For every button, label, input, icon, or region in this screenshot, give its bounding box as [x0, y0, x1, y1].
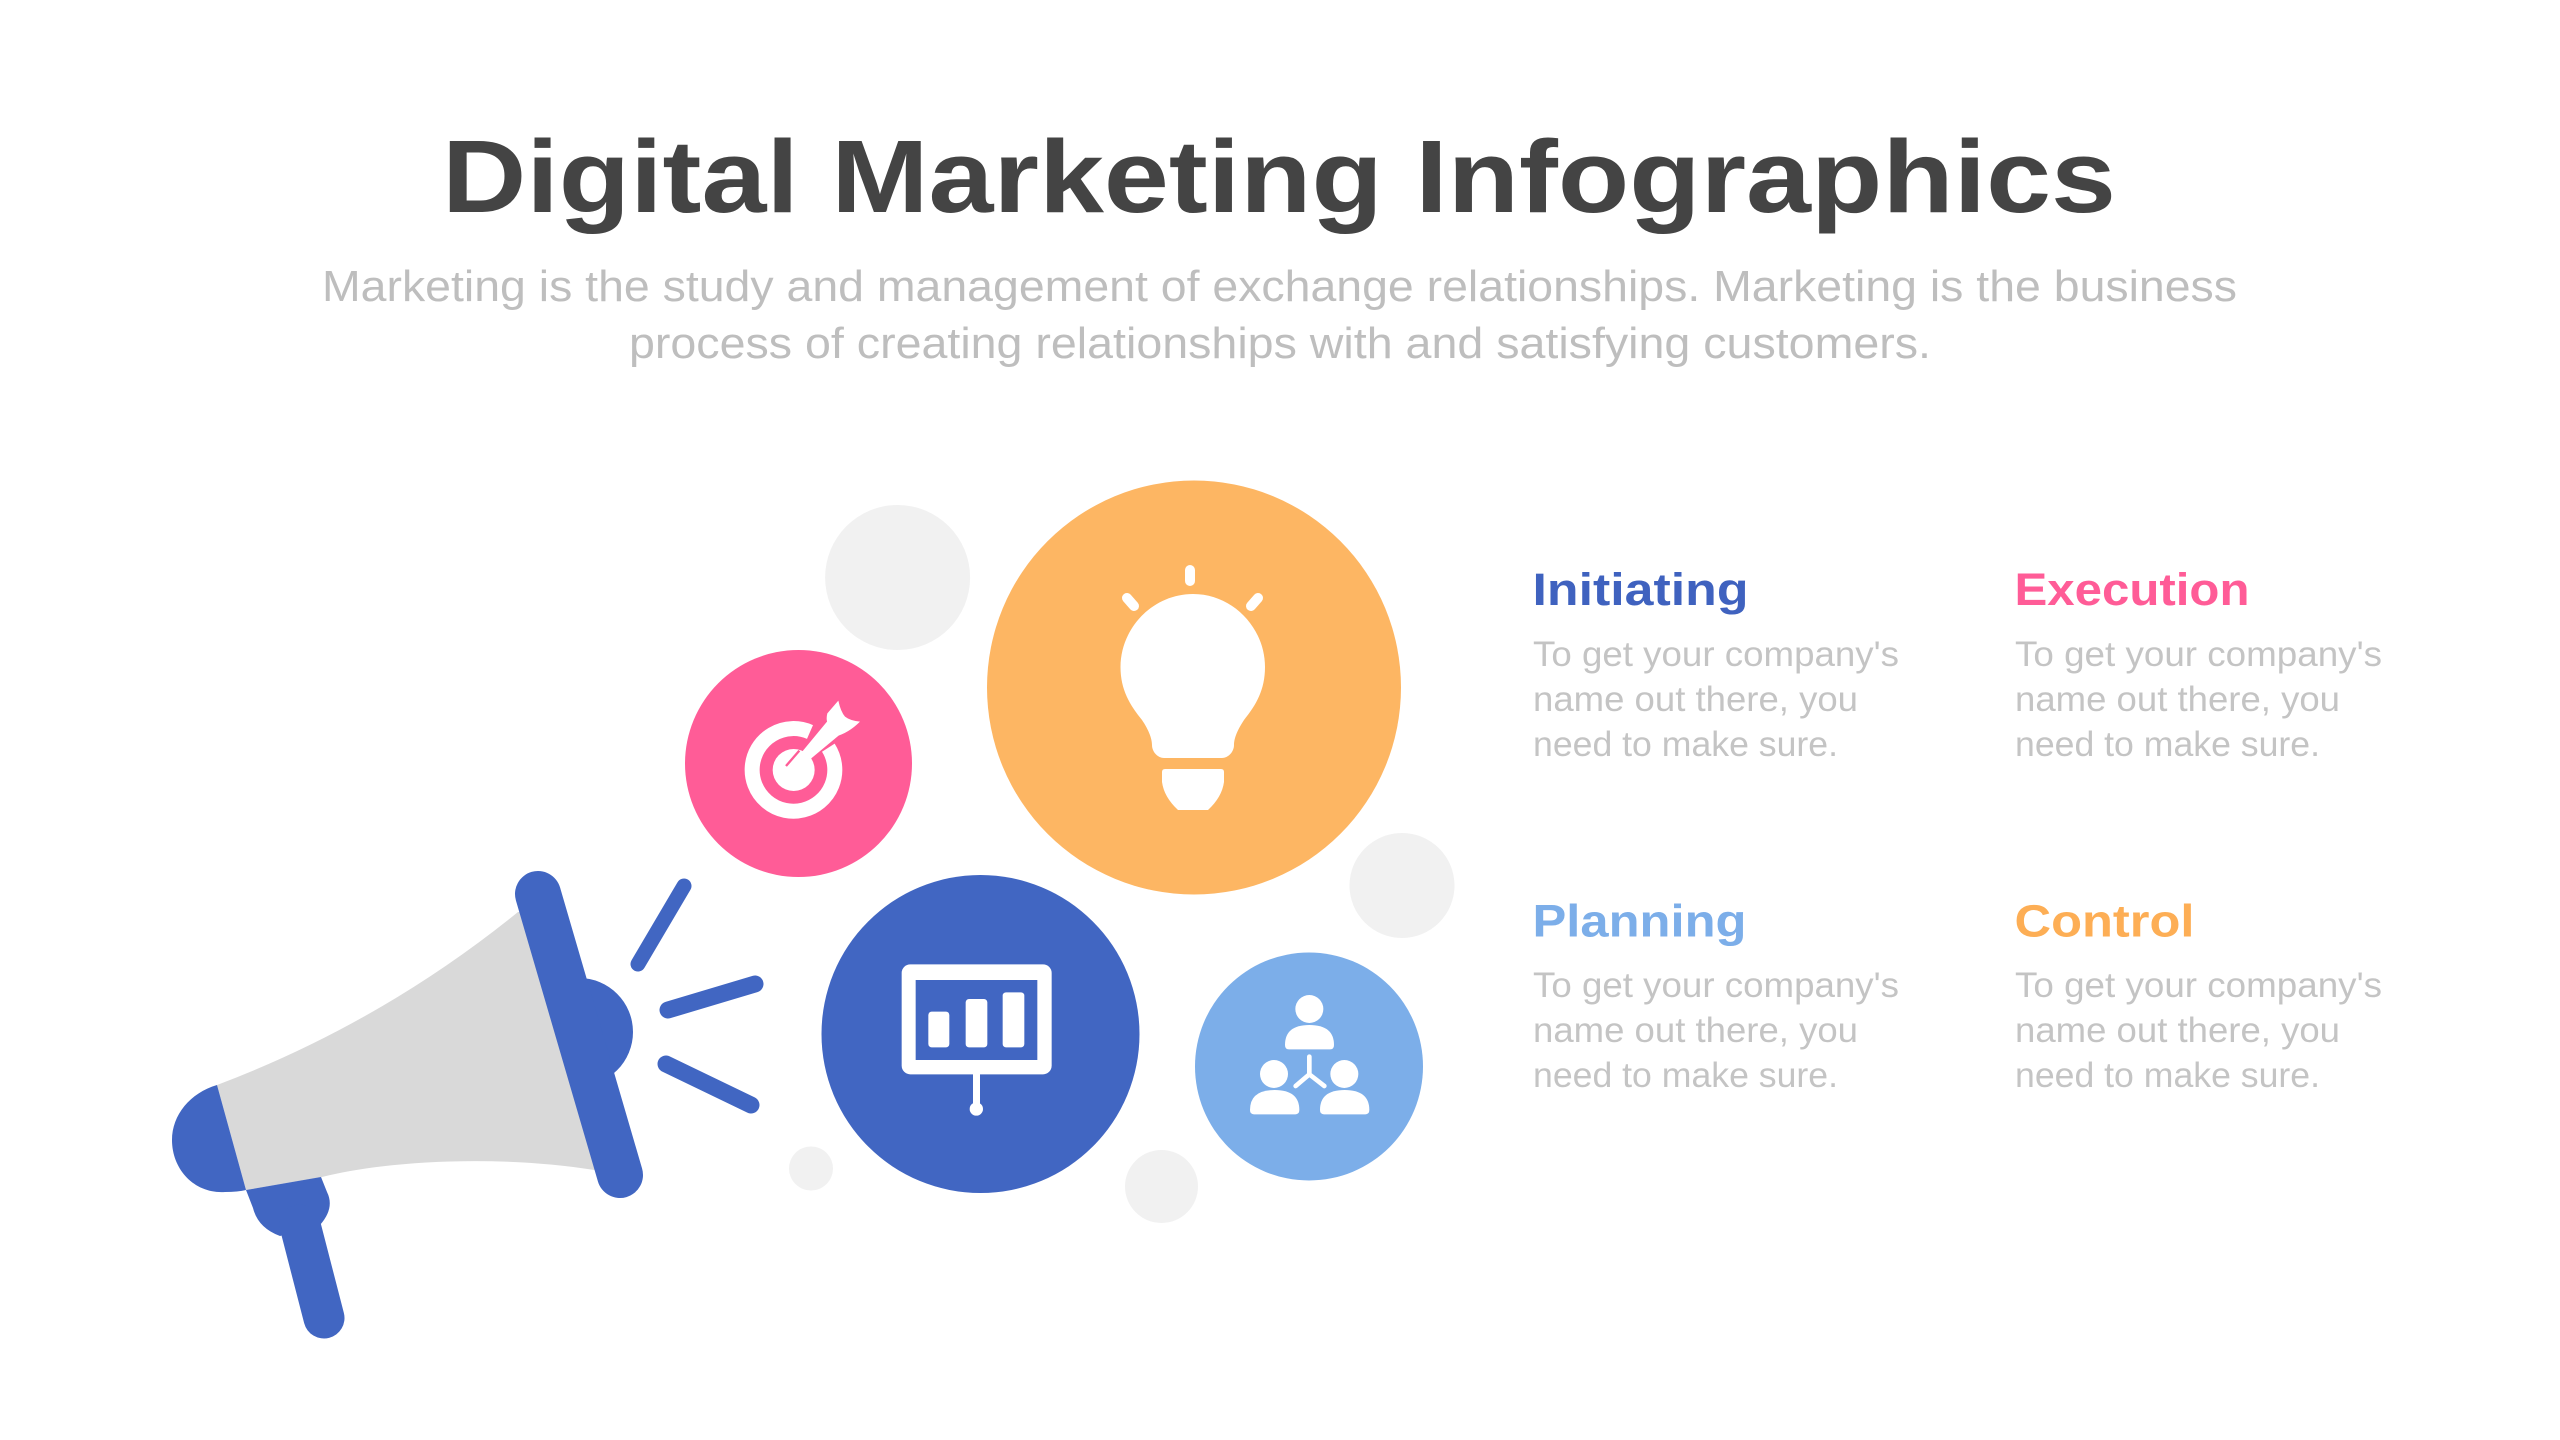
heading: Initiating: Initiating	[1532, 564, 1748, 615]
panel: Execution	[2014, 564, 2382, 764]
body text: Initiating: name out there, you	[1533, 680, 1858, 719]
body text: Control	[2015, 966, 2382, 1095]
icon: light bulb	[1120, 570, 1265, 810]
body text: Planning: To get your company's	[1533, 966, 1899, 1005]
icon: people network	[1250, 995, 1369, 1114]
icon: presentation chart	[902, 964, 1052, 1116]
subtitle text block	[322, 262, 2237, 368]
blue circle: presentation board	[822, 875, 1140, 1193]
body text: Execution: name out there, you	[2015, 680, 2340, 719]
body text: Control: To get your company's	[2015, 966, 2382, 1005]
megaphone illustration	[172, 886, 755, 1318]
body text: Control: need to make sure.	[2015, 1056, 2320, 1095]
heading: Planning: Planning	[1532, 896, 1746, 946]
body text: Planning	[1533, 966, 1899, 1095]
subtitle text block: process of creating relationships with and satisfying customers.	[629, 319, 1931, 368]
megaphone mouth rim	[538, 894, 620, 1175]
panel: Initiating	[1532, 564, 1899, 764]
decorative grey bubbles	[789, 505, 1454, 1223]
body text: Planning: name out there, you	[1533, 1011, 1858, 1050]
subtitle text block: Marketing is the study and management of exchange relationships. Marketing is the business	[322, 262, 2237, 311]
title: Digital Marketing Infographics	[442, 119, 2116, 234]
body text: Control: name out there, you	[2015, 1011, 2340, 1050]
megaphone horn body	[217, 912, 604, 1190]
orange circle: light bulb	[987, 480, 1401, 894]
light blue circle: team	[1195, 952, 1423, 1180]
panel: Planning	[1532, 896, 1899, 1095]
heading: Execution: Execution	[2014, 564, 2250, 615]
body text: Initiating	[1533, 635, 1899, 764]
panel: Control	[2014, 896, 2382, 1095]
sound rays	[638, 886, 755, 1105]
heading: Control: Control	[2014, 896, 2194, 946]
body text: Execution: To get your company's	[2015, 635, 2382, 674]
body text: Execution	[2015, 635, 2382, 764]
megaphone front bump	[525, 978, 633, 1086]
body text: Initiating: To get your company's	[1533, 635, 1899, 674]
megaphone handle	[246, 1177, 330, 1318]
body text: Planning: need to make sure.	[1533, 1056, 1838, 1095]
body text: Execution: need to make sure.	[2015, 725, 2320, 764]
megaphone back cap	[172, 1085, 246, 1192]
pink circle: target	[685, 650, 912, 877]
icon: target with dart	[752, 701, 860, 811]
body text: Initiating: need to make sure.	[1533, 725, 1838, 764]
